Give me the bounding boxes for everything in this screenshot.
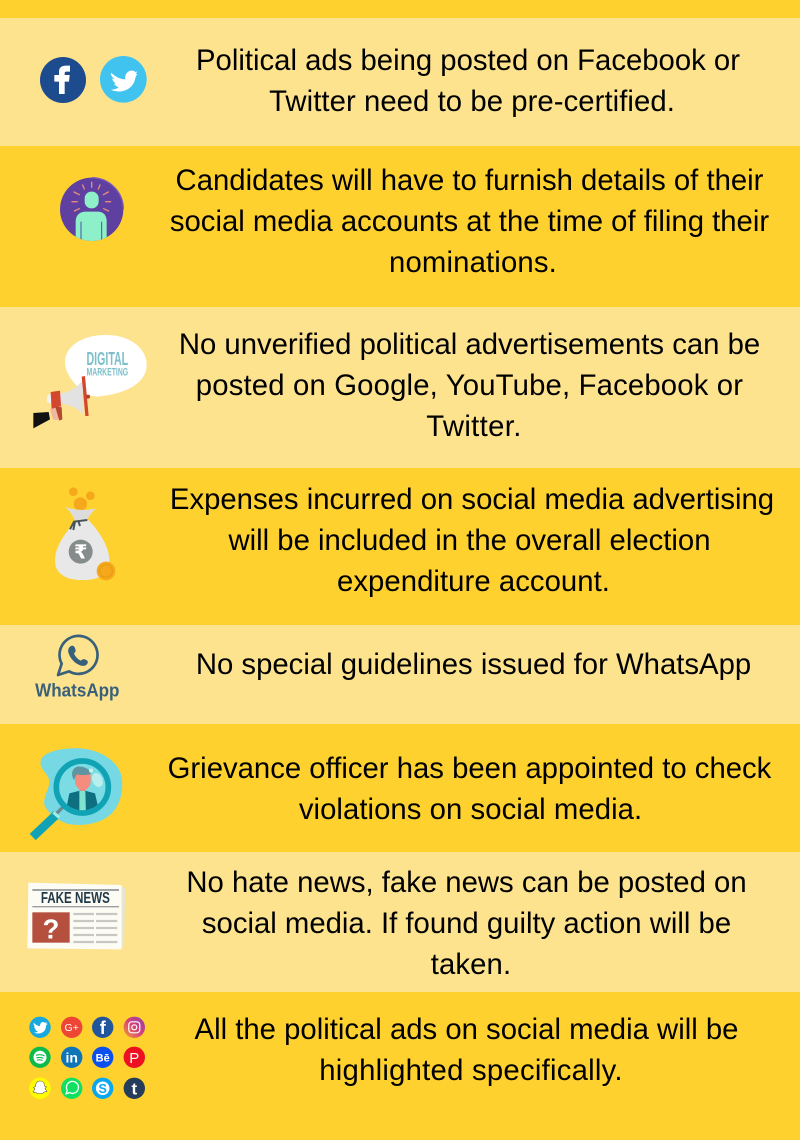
text: fake news: No hate news, fake news can be posted on — [186, 866, 747, 899]
icon: Facebook and Twitter — [40, 56, 147, 103]
icon: Twitter — [29, 1017, 51, 1038]
text: fake news: taken. — [431, 948, 511, 981]
text: expenses: expenditure account. — [337, 565, 610, 598]
icon grid: social media logos — [29, 1016, 145, 1099]
text: highlighted ads: All the political ads on social media will be — [195, 1013, 738, 1046]
icon: Spotify — [29, 1047, 51, 1068]
panel: top strip — [0, 0, 800, 18]
icon: Google Plus: G+ — [65, 1022, 79, 1034]
icon: Skype — [92, 1078, 113, 1099]
text: unverified ads — [179, 328, 760, 443]
text: highlighted ads: highlighted specifically. — [319, 1054, 623, 1087]
icon: Tumblr: t — [131, 1079, 137, 1098]
text: highlighted ads — [194, 1013, 738, 1087]
icon: rupee money bag — [55, 487, 116, 580]
icon: magnifying glass over officer — [30, 748, 122, 840]
panel: expenses row — [0, 468, 800, 625]
text: fake news: social media. If found guilty action will be — [202, 907, 731, 940]
panel: pre-certification row — [0, 18, 800, 146]
icon: Google Plus — [61, 1017, 82, 1038]
icon: Instagram — [124, 1017, 145, 1038]
text: candidate accounts: Candidates will have to furnish details of their — [176, 164, 763, 197]
text: fake news — [186, 866, 747, 981]
panel: candidate accounts row — [0, 146, 800, 307]
text: pre-certification: Political ads being posted on Facebook or — [196, 44, 740, 77]
icon: WhatsApp logo — [35, 634, 120, 701]
text: WhatsApp guidelines: No special guidelines issued for WhatsApp — [196, 648, 751, 681]
icon: digital marketing megaphone: DIGITAL — [86, 349, 128, 369]
text: expenses: will be included in the overall election — [228, 524, 711, 557]
icon: digital marketing megaphone: MARKETING — [86, 367, 128, 379]
icon: fake news newspaper — [27, 882, 126, 950]
text: candidate accounts: nominations. — [389, 246, 557, 279]
icon: Behance — [92, 1047, 113, 1068]
icon: Tumblr — [124, 1078, 145, 1099]
panel: WhatsApp row — [0, 625, 800, 724]
icon: digital marketing megaphone — [33, 335, 147, 428]
icon: LinkedIn — [61, 1047, 82, 1068]
icon: rupee money bag: ₹ — [74, 541, 87, 564]
text: grievance officer: violations on social media. — [299, 793, 642, 826]
icon: Facebook — [92, 1017, 113, 1038]
text: grievance officer — [168, 752, 772, 826]
text: candidate accounts — [170, 164, 769, 279]
icon: Facebook: f — [100, 1018, 107, 1038]
icon: Behance: Bē — [96, 1052, 110, 1064]
icon: Snapchat — [29, 1078, 51, 1099]
icon: Skype: S — [99, 1082, 107, 1096]
panel: highlighted ads row — [0, 992, 800, 1140]
icon: WhatsApp logo: WhatsApp — [35, 680, 120, 701]
icon: Pinterest: P — [129, 1050, 139, 1067]
icon: Pinterest — [124, 1047, 145, 1068]
text: unverified ads: posted on Google, YouTube, Facebook or — [196, 369, 743, 402]
text: pre-certification — [196, 44, 740, 118]
panel: grievance officer row — [0, 724, 800, 852]
text: grievance officer: Grievance officer has been appointed to check — [168, 752, 771, 785]
panel: fake news row — [0, 852, 800, 992]
text: unverified ads: Twitter. — [426, 410, 522, 443]
icon: fake news newspaper: FAKE NEWS — [41, 890, 110, 907]
icon: fake news newspaper: ? — [43, 913, 59, 944]
icon: candidate figure — [60, 177, 124, 241]
text: unverified ads: No unverified political advertisements can be — [179, 328, 760, 361]
text: candidate accounts: social media accounts at the time of filing their — [170, 205, 769, 238]
text: pre-certification: Twitter need to be pre-certified. — [269, 85, 675, 118]
panel: unverified ads row — [0, 307, 800, 468]
text: expenses — [170, 483, 774, 598]
icon: WhatsApp — [61, 1078, 82, 1099]
icon: LinkedIn: in — [65, 1049, 78, 1065]
text: expenses: Expenses incurred on social media advertising — [170, 483, 774, 516]
